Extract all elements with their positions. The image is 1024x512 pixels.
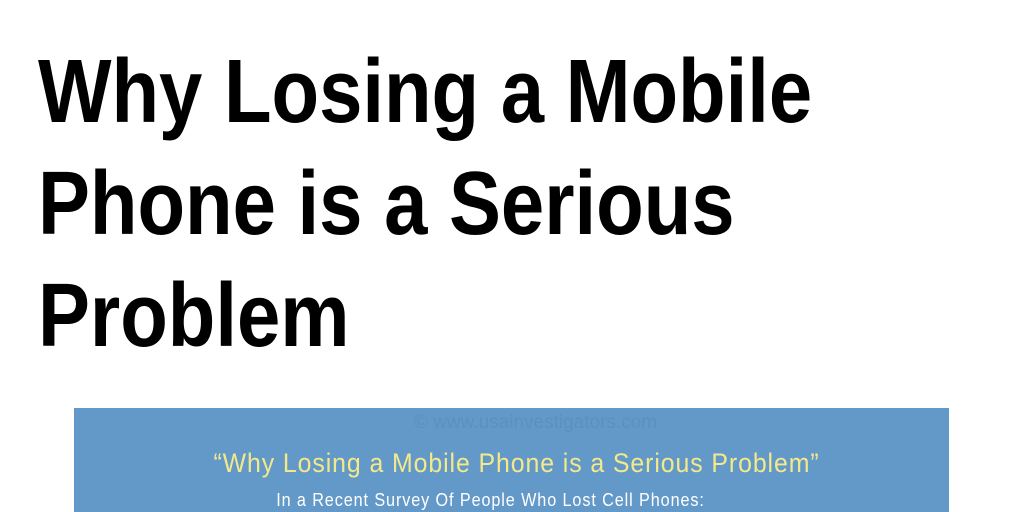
title: Phone is a Serious: [38, 154, 735, 254]
title: [38, 42, 812, 366]
panel: infographic preview: [74, 408, 949, 512]
title: Problem: [38, 266, 349, 366]
heading: “Why Losing a Mobile Phone is a Serious Problem”: [213, 448, 820, 478]
title: Why Losing a Mobile: [38, 42, 812, 142]
watermark: © www.usainvestigators.com: [414, 412, 657, 433]
subheading: In a Recent Survey Of People Who Lost Cell Phones:: [276, 490, 705, 510]
